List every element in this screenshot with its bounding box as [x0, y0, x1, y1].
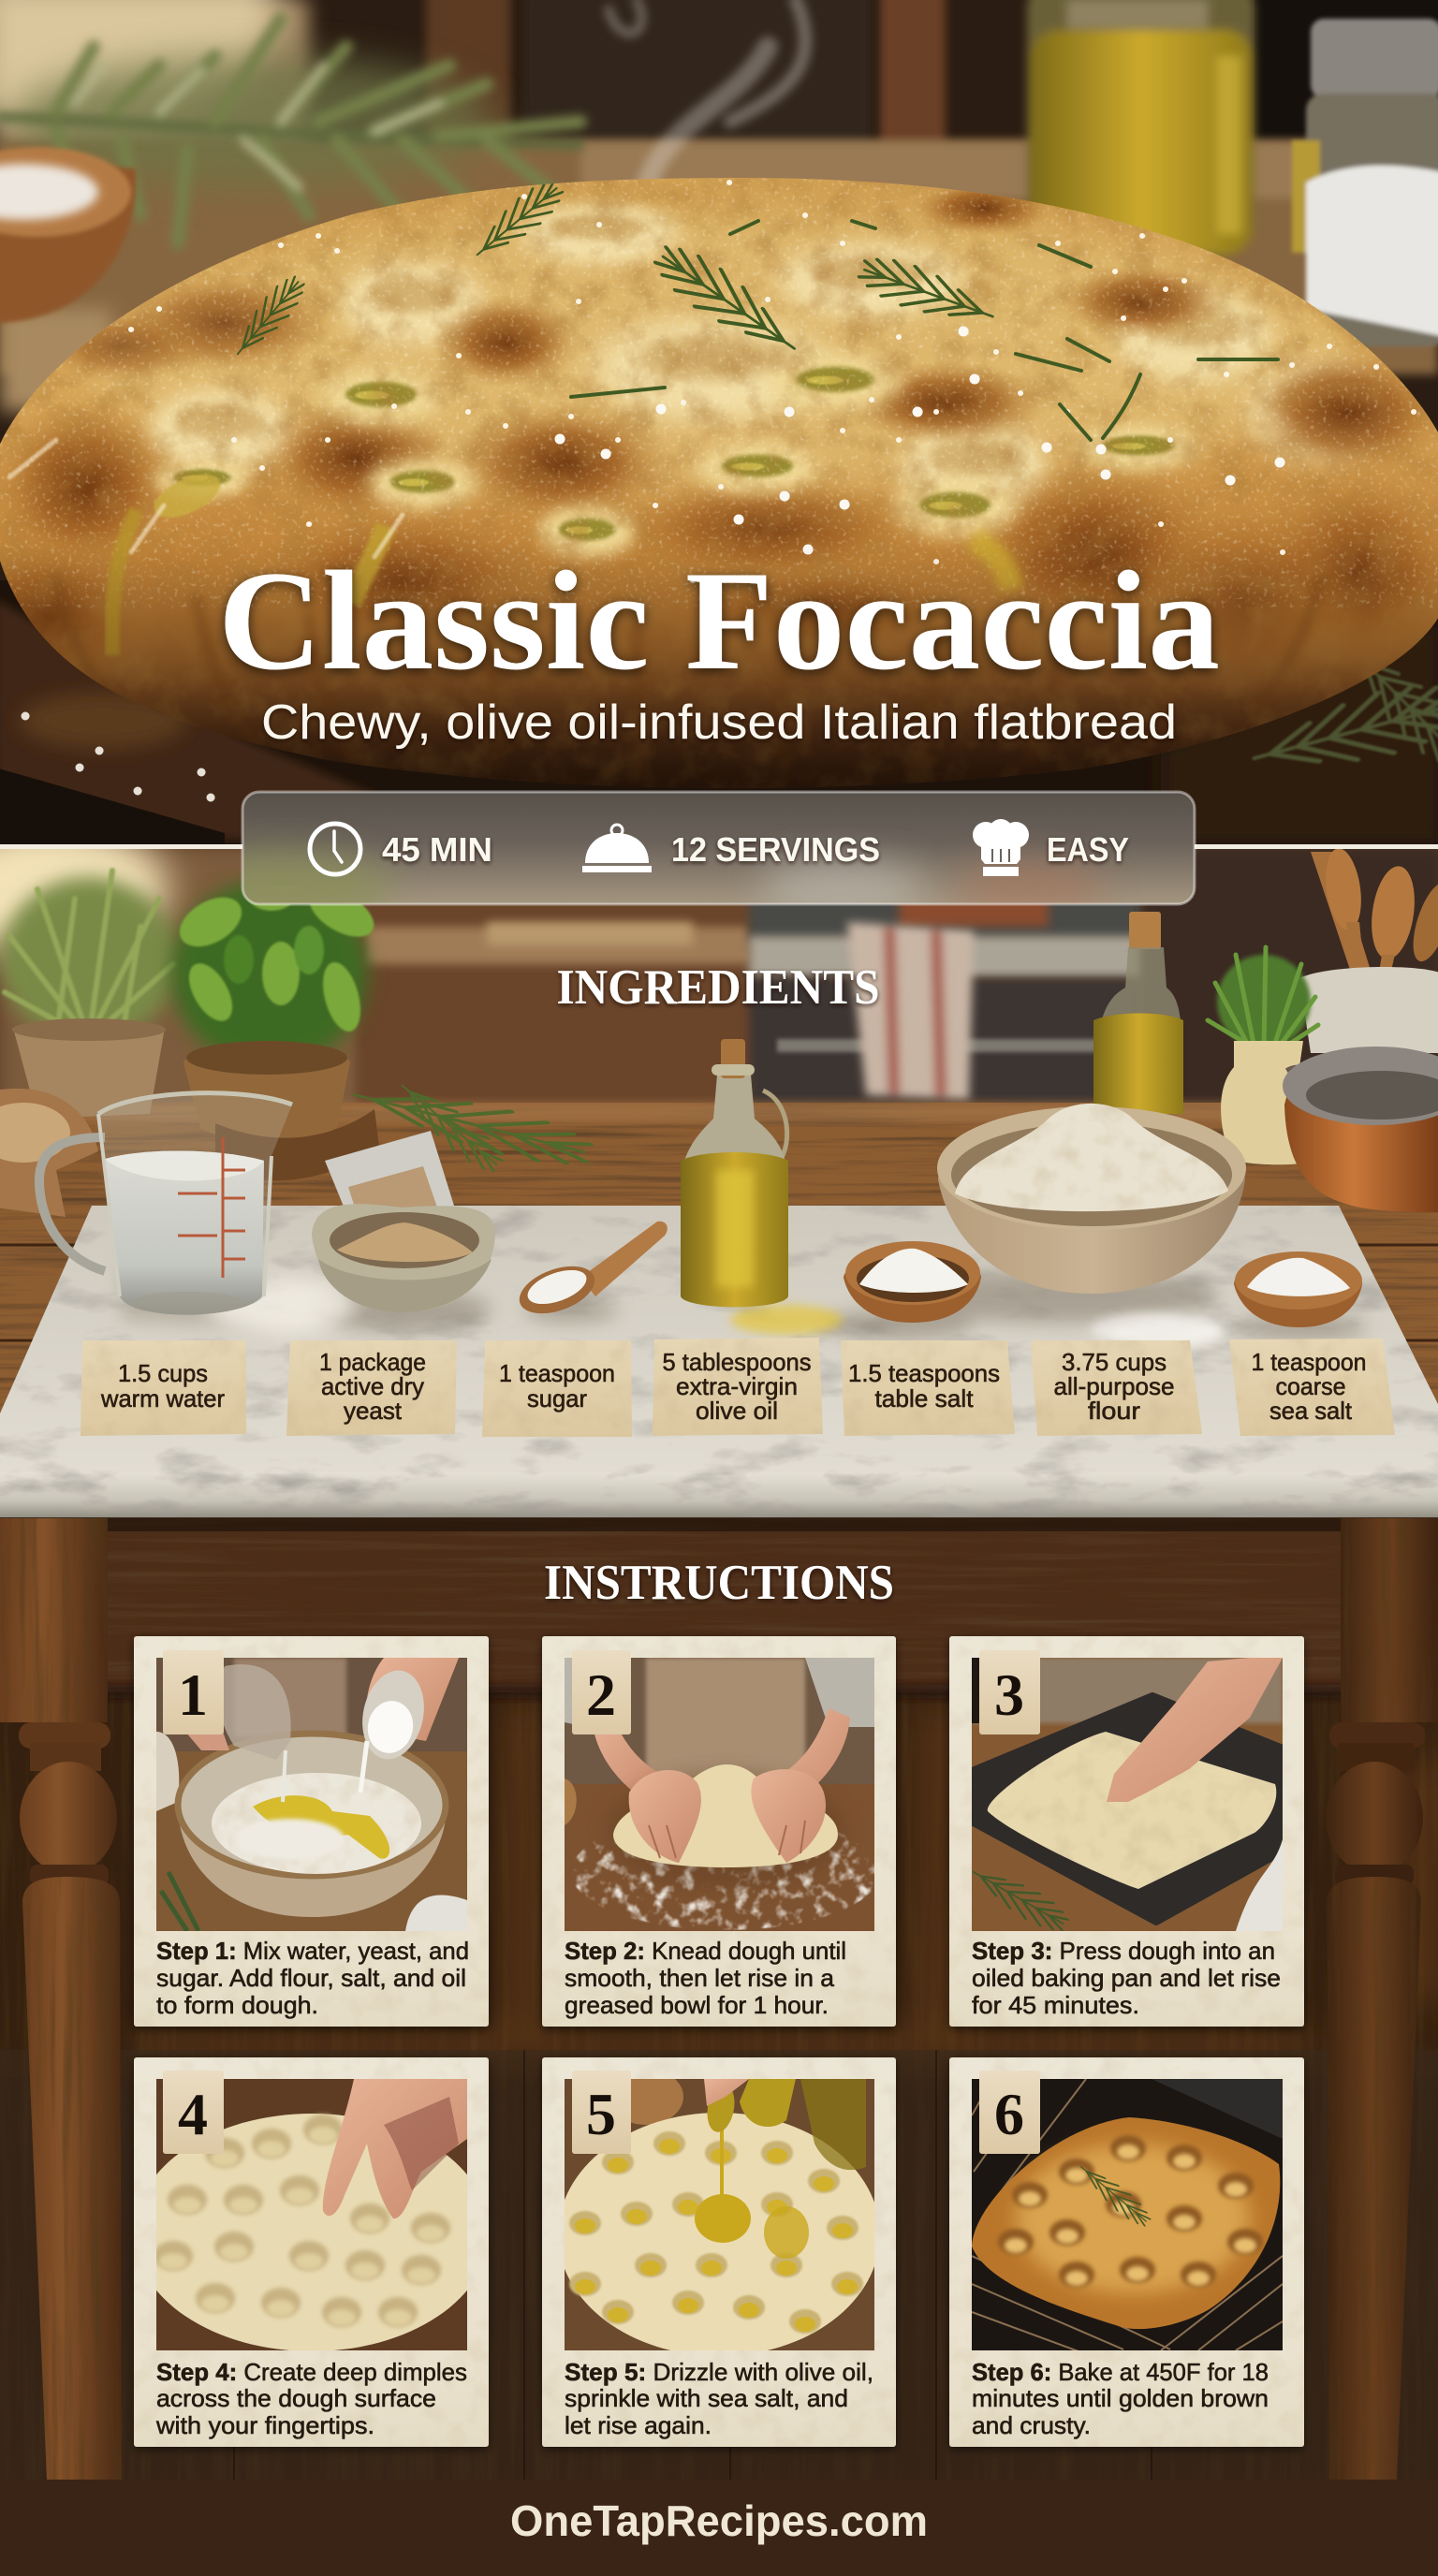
number tag 1: [163, 1650, 224, 1734]
steam: [609, 0, 805, 187]
towel: [847, 922, 974, 1100]
icon: rosemary right of board: [1251, 666, 1438, 764]
icon: table salt bowl: [844, 1241, 981, 1323]
label: 1 teaspoon coarse sea salt: 1 teaspoon: [1251, 1348, 1367, 1376]
left table leg: [0, 1518, 122, 2481]
step 5 text: let rise again.: [565, 2411, 712, 2439]
panel: table and floor background: [0, 1518, 1438, 2482]
step 4 text: across the dough surface: [156, 2384, 436, 2412]
icon: thyme plant with pot: [0, 871, 178, 1119]
label: 5 tablespoons extra-virgin olive oil: 5 tablespoons: [663, 1348, 811, 1376]
step 6 text: [972, 2358, 1269, 2439]
step 1 text: sugar. Add flour, salt, and oil: [156, 1964, 466, 1992]
label: 1 teaspoon coarse sea salt: [1229, 1339, 1395, 1436]
image: baked focaccia in oven: [972, 2079, 1283, 2354]
icon: rosemary on table: [350, 1074, 593, 1178]
step 3 text: for 45 minutes.: [972, 1991, 1139, 2019]
step 6 text: minutes until golden brown: [972, 2384, 1269, 2412]
icon: chef hat: [973, 819, 1029, 876]
image: golden focaccia loaf: [0, 168, 1438, 796]
flour dust: [1109, 1321, 1222, 1347]
panel: wooden board: [0, 580, 1438, 852]
step 4 text: with your fingertips.: [155, 2411, 374, 2439]
servings text: 12 SERVINGS: [671, 830, 880, 869]
step 4 text: Step 4: Create deep dimples: [156, 2358, 467, 2386]
panel: kitchen background: [0, 824, 1438, 1521]
label: 1 teaspoon coarse sea salt: sea salt: [1269, 1397, 1353, 1425]
step 5 text: [565, 2358, 873, 2439]
label: 3.75 cups all-purpose flour: 3.75 cups: [1062, 1348, 1167, 1376]
label: 1.5 cups warm water: 1.5 cups: [118, 1359, 208, 1387]
icon: serving cloche: [582, 825, 652, 872]
icon: wooden spoon of sugar: [513, 1222, 668, 1323]
heading: instructions: INSTRUCTIONS: [544, 1556, 894, 1610]
label: 1 teaspoon coarse sea salt: coarse: [1275, 1372, 1346, 1400]
footer website: OneTapRecipes.com: [510, 2496, 928, 2545]
number tag 4: [163, 2071, 224, 2154]
label: 3.75 cups all-purpose flour: all-purpose: [1054, 1372, 1174, 1400]
icon: salt bowl left: [0, 147, 136, 323]
label: 1 package active dry yeast: active dry: [321, 1372, 424, 1400]
step 4 text: [155, 2358, 467, 2439]
icon: yeast packet and bowl: [312, 1131, 495, 1312]
icon: measuring cup of water: [39, 1093, 292, 1315]
label: 3.75 cups all-purpose flour: flour: [1088, 1397, 1140, 1425]
step 2 text: smooth, then let rise in a: [565, 1964, 835, 1992]
label: 5 tablespoons extra-virgin olive oil: olive oil: [696, 1397, 778, 1425]
label: 1 teaspoon sugar: [482, 1340, 632, 1437]
step 3 text: [972, 1937, 1281, 2019]
number tag 5: [572, 2071, 631, 2154]
label: 1 package active dry yeast: yeast: [344, 1397, 403, 1425]
icon: herb in cream pot: [1208, 947, 1323, 1164]
number tag 1: 1: [178, 1661, 208, 1728]
label: 1.5 teaspoons table salt: table salt: [874, 1384, 974, 1412]
subtitle: Chewy, olive oil-infused Italian flatbread: [261, 695, 1177, 750]
image: drizzling olive oil: [558, 2069, 880, 2356]
icon: copper pot: [1283, 1046, 1438, 1212]
icon: sea salt bowl: [1234, 1251, 1362, 1327]
step 1 text: Step 1: Mix water, yeast, and: [156, 1937, 469, 1965]
label: 1 teaspoon sugar: sugar: [527, 1384, 587, 1412]
icon: back oil bottle: [1093, 912, 1183, 1114]
step 2 text: greased bowl for 1 hour.: [565, 1991, 829, 2019]
white divider bar: [0, 844, 1438, 849]
step 3 text: Step 3: Press dough into an: [972, 1937, 1275, 1965]
label: 1.5 cups warm water: warm water: [100, 1384, 225, 1412]
step 2 text: [565, 1937, 846, 2019]
heading: ingredients: INGREDIENTS: [556, 960, 880, 1015]
number tag 2: 2: [586, 1661, 616, 1728]
label: 1.5 teaspoons table salt: 1.5 teaspoons: [848, 1359, 1000, 1387]
number tag 3: 3: [994, 1661, 1024, 1728]
step 6 text: Step 6: Bake at 450F for 18: [972, 2358, 1269, 2386]
difficulty text: EASY: [1047, 830, 1129, 869]
number tag 4: 4: [178, 2081, 208, 2147]
time text: 45 MIN: [382, 830, 492, 869]
label: 5 tablespoons extra-virgin olive oil: extra-virgin: [676, 1372, 798, 1400]
image: dough pressed in pan: [966, 1658, 1287, 1937]
icon: olive oil bottle: [1027, 0, 1255, 257]
card: step 5: [542, 2057, 896, 2447]
panel: marble slab: [0, 1206, 1438, 1519]
step 6 text: and crusty.: [972, 2411, 1091, 2439]
card: step 4: [134, 2057, 490, 2447]
image: mixing bowl: [156, 1658, 467, 1931]
number tag 5: 5: [586, 2081, 616, 2147]
label: 3.75 cups all-purpose flour: [1031, 1340, 1202, 1436]
number tag 3: [979, 1650, 1040, 1734]
label: 1 package active dry yeast: 1 package: [319, 1348, 426, 1376]
step 5 text: sprinkle with sea salt, and: [565, 2384, 848, 2412]
step 1 text: [156, 1937, 469, 2019]
panel: hero photo background: [0, 0, 1438, 852]
number tag 6: [979, 2071, 1040, 2154]
step 1 text: to form dough.: [156, 1991, 318, 2019]
icon: clock: [310, 824, 360, 874]
footer band: [0, 2480, 1438, 2576]
number tag 2: [572, 1650, 631, 1734]
card: step 3: [949, 1636, 1304, 2027]
label: 1.5 teaspoons table salt: [841, 1340, 1015, 1436]
label: 1.5 cups warm water: [81, 1340, 246, 1436]
card: step 6: [949, 2057, 1304, 2447]
icon: blurred rosemary top left: [0, 19, 580, 243]
step 5 text: Step 5: Drizzle with olive oil,: [565, 2358, 873, 2386]
image: kneading dough: [565, 1658, 880, 1931]
icon: olive oil bottle with cork: [681, 1039, 788, 1307]
label: 1 teaspoon sugar: 1 teaspoon: [499, 1359, 615, 1387]
icon: utensils crock: [1299, 846, 1438, 1053]
step 3 text: oiled baking pan and let rise: [972, 1964, 1281, 1992]
right table leg: [1326, 1518, 1438, 2481]
number tag 6: 6: [994, 2081, 1024, 2147]
label: 1 package active dry yeast: [286, 1340, 457, 1436]
icon: salt jar: [1292, 19, 1438, 346]
label: 5 tablespoons extra-virgin olive oil: [653, 1338, 823, 1436]
icon: flour bowl: [937, 1104, 1246, 1294]
icon: basil plant with pot: [171, 877, 382, 1180]
step 2 text: Step 2: Knead dough until: [565, 1937, 846, 1965]
image: dimpling dough: [134, 2079, 490, 2351]
title: Classic Focaccia: [218, 542, 1220, 699]
icon: burlap sack: [0, 1089, 98, 1217]
card: step 1: [134, 1636, 489, 2027]
card: step 2: [542, 1636, 896, 2027]
panel: stats bar: [169, 792, 1195, 927]
